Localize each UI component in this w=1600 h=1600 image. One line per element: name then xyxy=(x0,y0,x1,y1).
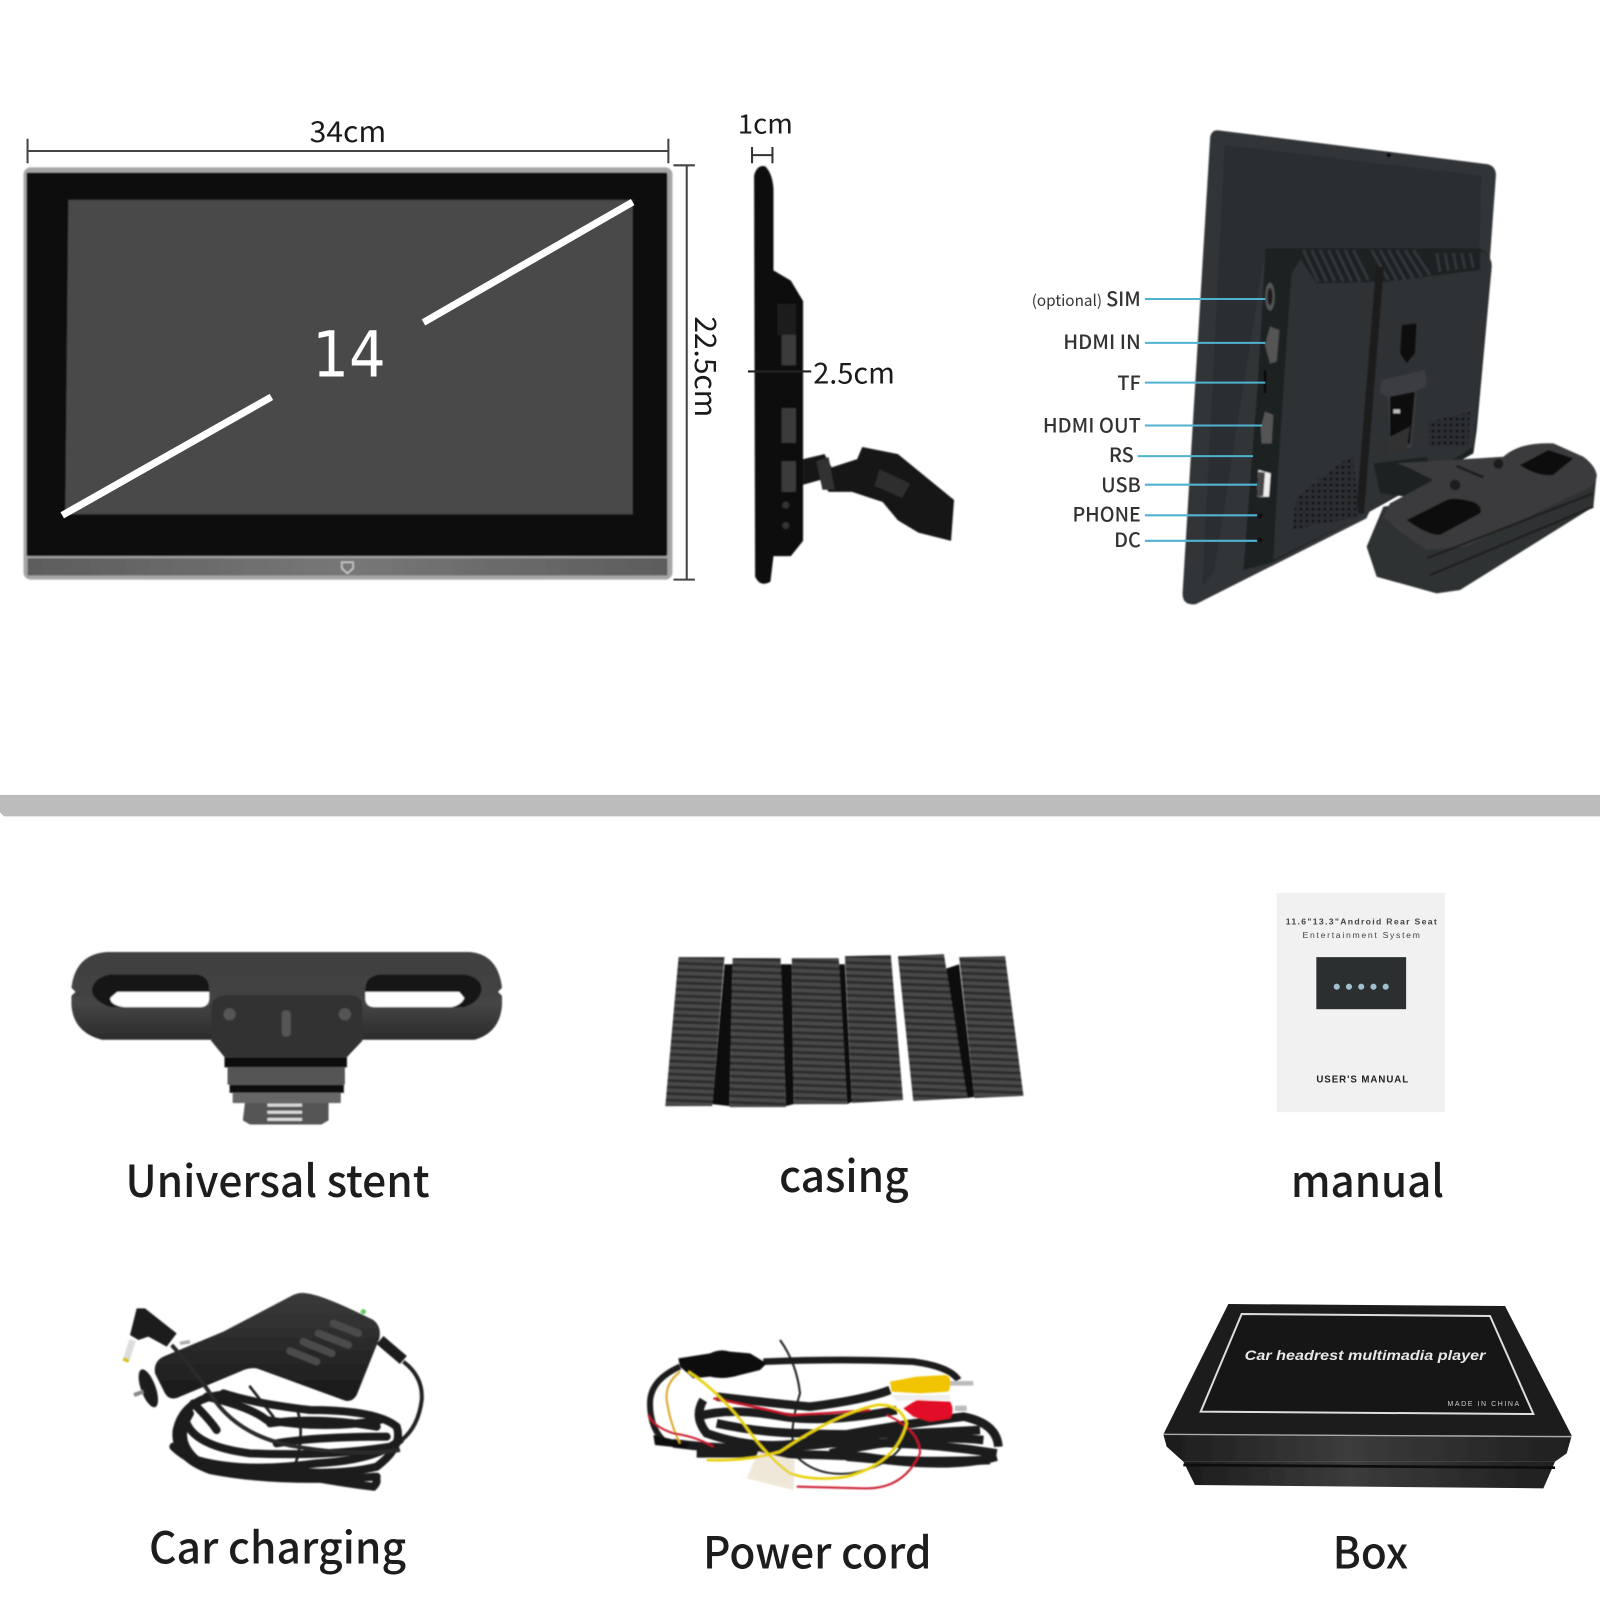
port labels: HDMI OUT xyxy=(1043,410,1141,439)
icon: packaging box xyxy=(1163,1304,1572,1488)
screen size diagonal xyxy=(62,202,633,515)
headrest bracket xyxy=(1373,457,1433,497)
coiled cable xyxy=(173,1387,400,1487)
grips xyxy=(290,1323,358,1362)
cigarette plug xyxy=(135,1367,162,1410)
hook xyxy=(1400,323,1417,363)
screen size number: 14 xyxy=(312,318,386,392)
depth label: 2.5cm xyxy=(813,352,895,393)
thickness dimension xyxy=(752,147,772,163)
icon: manual booklet: Entertainment System xyxy=(1303,930,1420,940)
monitor front xyxy=(23,167,672,580)
height dimension line xyxy=(673,165,695,580)
coloured wires xyxy=(648,1372,920,1488)
panel: front view with dimensions xyxy=(23,110,729,580)
status led xyxy=(361,1309,366,1314)
inline connector xyxy=(678,1350,767,1378)
section divider xyxy=(0,795,1600,816)
icon: packaging box: Car headrest multimadia player xyxy=(1245,1348,1486,1363)
icon: packaging box: MADE IN CHINA xyxy=(1448,1401,1520,1408)
panel: box xyxy=(1163,1304,1572,1581)
port labels: PHONE xyxy=(1072,498,1141,527)
monitor side silhouette xyxy=(754,166,954,584)
black cables xyxy=(650,1340,998,1474)
panel: casing xyxy=(665,954,1023,1205)
panel: manual xyxy=(1277,893,1445,1210)
height label: 22.5cm xyxy=(686,316,729,417)
panel: power cord xyxy=(648,1340,998,1581)
port labels xyxy=(1032,283,1141,553)
screen xyxy=(65,200,633,514)
icon: car charger and cable xyxy=(125,1293,422,1487)
yellow signal wire xyxy=(688,1372,907,1479)
label: box: Box xyxy=(1333,1517,1408,1581)
adapter body xyxy=(155,1293,380,1401)
label: universal stent: Universal stent xyxy=(126,1146,430,1210)
port labels: DC xyxy=(1114,524,1141,553)
ports xyxy=(1265,283,1275,311)
label: car charging: Car charging xyxy=(149,1512,406,1576)
width label: 34cm xyxy=(310,110,386,151)
icon: stent xyxy=(71,952,502,1124)
rear housing xyxy=(1243,248,1597,593)
port labels: HDMI IN xyxy=(1063,326,1141,355)
power button xyxy=(342,562,353,573)
port labels: (optional) xyxy=(1032,289,1102,311)
icon: manual booklet: 11.6"13.3"Android Rear Seat xyxy=(1286,916,1437,926)
barrel connector xyxy=(127,1340,133,1358)
label: casing: casing xyxy=(779,1141,909,1205)
icon: casing slats xyxy=(665,954,1023,1107)
depth dimension line xyxy=(748,370,811,372)
panel: car charging xyxy=(125,1293,422,1576)
thickness label: 1cm xyxy=(738,103,793,142)
right cable xyxy=(402,1362,422,1440)
port labels: SIM xyxy=(1106,283,1141,312)
monitor rear xyxy=(1183,130,1597,604)
icon: wiring harness xyxy=(648,1340,998,1490)
port labels: RS xyxy=(1109,439,1134,468)
panel: universal stent xyxy=(71,952,502,1210)
port labels: USB xyxy=(1101,469,1141,498)
speaker grilles xyxy=(1428,412,1470,447)
width dimension line xyxy=(28,139,668,163)
label: power cord: Power cord xyxy=(703,1517,932,1581)
icon: manual booklet xyxy=(1277,893,1445,1112)
white plug xyxy=(747,1452,795,1490)
side bracket xyxy=(803,447,954,541)
vent ribs xyxy=(1293,248,1480,283)
mount plate xyxy=(1380,370,1427,453)
port labels: TF xyxy=(1117,367,1141,396)
panel: side view with dimensions xyxy=(738,103,954,584)
label: manual: manual xyxy=(1291,1146,1444,1210)
port leader lines xyxy=(1138,299,1265,541)
panel: rear view with port labels xyxy=(1032,130,1597,604)
rca plugs xyxy=(950,1376,973,1390)
icon: manual booklet: USER'S MANUAL xyxy=(1316,1075,1408,1086)
